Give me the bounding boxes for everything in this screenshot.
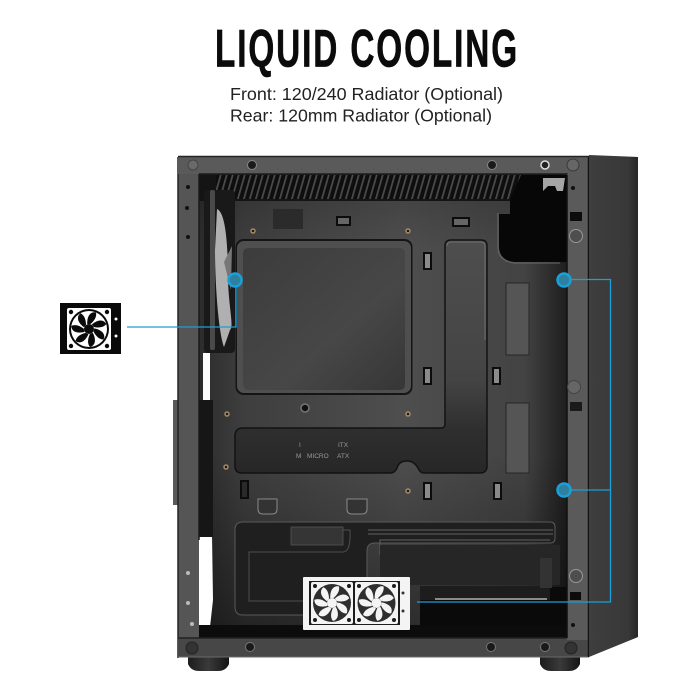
motherboard size labels: M (296, 453, 301, 460)
rear fan (204, 190, 235, 353)
hooks (258, 499, 367, 514)
top frame rail (178, 156, 589, 174)
right frame rail (567, 156, 589, 657)
icon: single fan radiator (60, 303, 121, 354)
marker: rear fan (228, 274, 242, 286)
rear opening dark corner (499, 175, 567, 262)
title: LIQUID COOLING (215, 20, 519, 78)
wall cutouts (506, 283, 529, 473)
callout lines (127, 280, 610, 602)
left side panel edge (173, 400, 179, 505)
small slots (241, 209, 501, 499)
subtitle text (230, 84, 503, 126)
computer case (173, 155, 638, 671)
left inner strip (199, 400, 213, 537)
subtitle text: Front: 120/240 Radiator (Optional) (230, 84, 503, 104)
front panel (589, 155, 638, 657)
marker: front bottom (558, 484, 570, 496)
lower board recess (235, 240, 487, 473)
motherboard size labels: MICRO (307, 453, 329, 460)
top vent (199, 174, 569, 201)
rear bracket (543, 178, 565, 191)
gap behind fan, white (199, 353, 213, 627)
lower shroud (235, 522, 560, 615)
rear opening highlight (498, 213, 560, 263)
center screw (301, 404, 309, 412)
case feet (188, 655, 580, 671)
subtitle text: Rear: 120mm Radiator (Optional) (230, 106, 492, 126)
back wall (199, 174, 569, 640)
motherboard size labels: ITX (338, 442, 349, 449)
floor shadow (199, 625, 568, 640)
upper recessed panel (236, 239, 412, 395)
bottom frame rail (178, 638, 589, 657)
icon: dual fan radiator (303, 577, 410, 630)
motherboard size labels (296, 442, 350, 460)
PSU bay dark area (420, 558, 567, 639)
motherboard size labels: ATX (337, 453, 350, 460)
standoff screws (224, 229, 410, 493)
motherboard size labels: I (299, 442, 301, 449)
left frame rail (178, 157, 199, 658)
marker: front top (558, 274, 570, 286)
